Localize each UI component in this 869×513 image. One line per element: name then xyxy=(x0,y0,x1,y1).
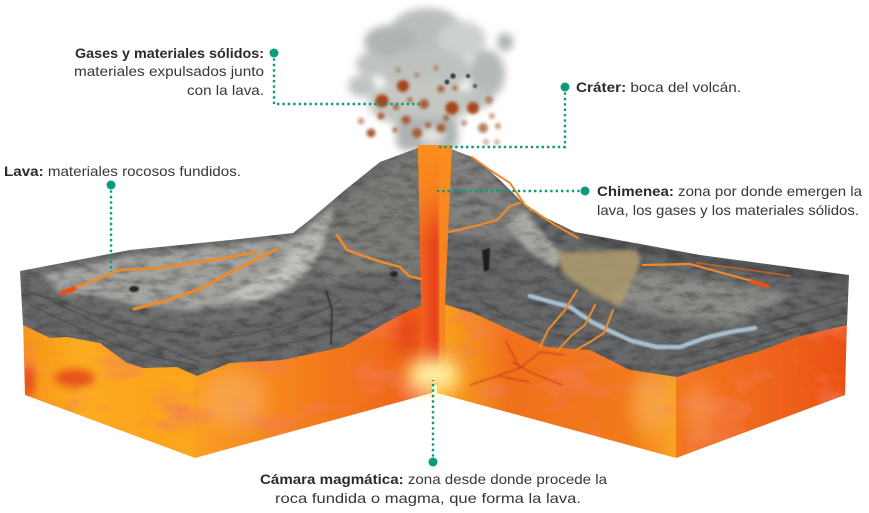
marker dot xyxy=(106,180,116,190)
vents, streams and deposits on the right flank xyxy=(470,250,755,385)
left rock mass xyxy=(15,145,425,380)
right lava stream xyxy=(643,264,767,285)
strata lines left xyxy=(24,290,395,366)
lava streams xyxy=(62,157,790,350)
grey-blue water stream xyxy=(530,296,755,347)
label: cámara magmática xyxy=(260,471,607,506)
magma chamber glow xyxy=(407,357,459,393)
leader: crater xyxy=(437,82,570,147)
leader: gases xyxy=(270,48,422,104)
right thin stream xyxy=(697,263,790,276)
hot rock fragments xyxy=(358,66,501,145)
dark cave xyxy=(482,248,490,272)
left lava stream head xyxy=(62,289,74,293)
label: gases y materiales sólidos: con la lava. xyxy=(187,82,264,98)
magma left outer face xyxy=(23,325,195,458)
cutaway block: left magma xyxy=(20,295,433,460)
grey plain xyxy=(610,272,790,325)
magma left inner face xyxy=(195,295,433,460)
branch lava stream xyxy=(449,203,520,232)
edge red xyxy=(21,366,35,398)
light slab on the right flank xyxy=(503,212,562,268)
central lava stream xyxy=(337,235,421,279)
leader: lava xyxy=(106,180,116,272)
base dark rock right xyxy=(436,145,856,380)
strata band xyxy=(40,274,420,331)
sulphur deposit xyxy=(556,250,641,307)
base dark rock left xyxy=(15,145,425,380)
dark top strip xyxy=(575,232,849,285)
label: gases y materiales sólidos: materiales expulsados junto xyxy=(74,63,264,79)
leader: chimney xyxy=(435,186,590,196)
magma right inner face xyxy=(437,295,677,460)
light surface band of left flank xyxy=(38,205,334,310)
label: lava: Lava: materiales rocosos fundidos. xyxy=(4,163,241,179)
label: chimenea xyxy=(597,183,862,218)
red patch near chimney xyxy=(396,313,420,357)
label: chimenea: Chimenea: zona por donde emergen la xyxy=(597,183,862,199)
label: gases y materiales sólidos xyxy=(74,45,264,98)
red patch xyxy=(55,369,95,387)
marker dot xyxy=(560,82,570,92)
left lava stream lower xyxy=(134,249,277,309)
chimney top glow xyxy=(418,145,452,305)
pale orange band xyxy=(684,382,716,438)
leader: magma chamber xyxy=(428,380,438,466)
label: cráter: Cráter: boca del volcán. xyxy=(576,79,741,95)
upper cone tone xyxy=(448,150,534,241)
strata lines right xyxy=(480,300,848,368)
marker dot xyxy=(580,186,590,196)
label: cámara magmática: roca fundida o magma, que forma la lava. xyxy=(275,490,581,506)
right rock mass xyxy=(436,145,856,380)
label: chimenea: lava, los gases y los materiales sólidos. xyxy=(597,202,859,218)
descending stream one xyxy=(540,290,577,347)
pale highlight of flank xyxy=(225,225,320,302)
marker dot xyxy=(270,48,278,58)
cutaway block: right magma xyxy=(437,295,850,460)
dark rock fragments xyxy=(445,73,477,88)
magma veins xyxy=(470,340,565,385)
upper right lava stream xyxy=(472,157,578,238)
marker dot xyxy=(428,458,438,466)
pale patch xyxy=(630,375,670,435)
dark crack xyxy=(326,290,332,345)
rock crust and volcano cone xyxy=(15,145,856,380)
magma right outer face xyxy=(676,325,847,458)
chimney shaft xyxy=(418,145,452,385)
smoke cloud with ejected solid materials xyxy=(348,8,513,150)
descending stream two xyxy=(558,305,595,350)
left lava stream upper xyxy=(66,252,257,291)
right lava stream head xyxy=(752,282,767,286)
pit near chimney xyxy=(390,271,398,277)
chimney xyxy=(418,145,452,385)
label: cámara magmática: Cámara magmática: zona desde donde procede la xyxy=(260,471,607,487)
pit xyxy=(129,286,139,292)
pale patch xyxy=(203,372,267,428)
descending stream three xyxy=(576,310,613,350)
cone dark flank xyxy=(320,152,420,284)
label: gases y materiales sólidos: Gases y materiales sólidos: xyxy=(75,45,264,61)
ash cloud xyxy=(348,8,513,150)
